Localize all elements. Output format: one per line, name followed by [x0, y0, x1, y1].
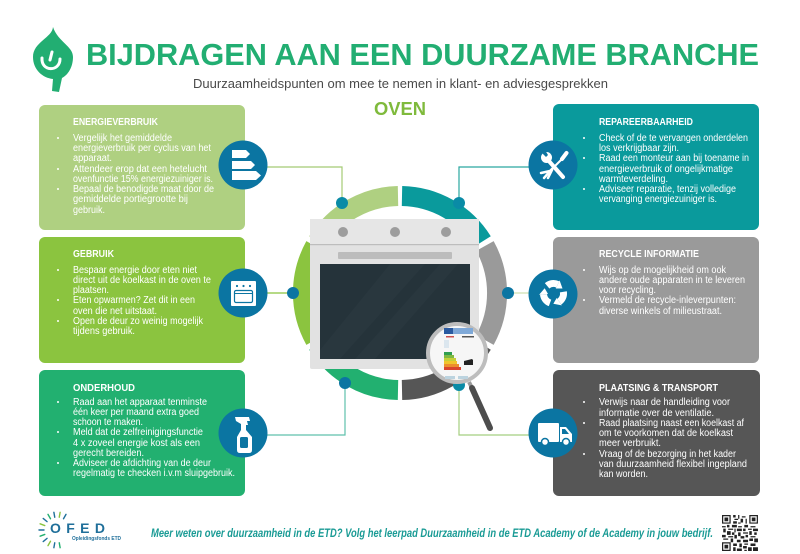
- text block: repareerbaarheid tips: energieverbruik of ongelijkmatige: [599, 164, 734, 175]
- text block: repareerbaarheid tips: los verkrijgbaar zijn.: [599, 143, 679, 154]
- panel: plaatsing en transport: [553, 370, 760, 496]
- text block: plaatsing tips: [583, 397, 747, 480]
- text block: repareerbaarheid tips: Adviseer reparatie, tenzij volledige: [599, 184, 736, 195]
- text block: energieverbruik tips: [57, 133, 215, 216]
- heading: energieverbruik: ENERGIEVERBRUIK: [73, 117, 158, 128]
- text block: energieverbruik tips: gebruik.: [73, 205, 105, 216]
- text block: energieverbruik tips: ovenfunctie 15% energiezuiniger is.: [73, 174, 213, 185]
- text block: energieverbruik tips: apparaat.: [73, 153, 112, 164]
- title: BIJDRAGEN AAN EEN DUURZAME BRANCHE: [86, 38, 759, 72]
- heading: repareerbaarheid: REPAREERBAARHEID: [599, 117, 693, 128]
- text block: onderhoud tips: schoon te maken.: [73, 417, 143, 428]
- text block: plaatsing tips: informatie over de ventilatie.: [599, 408, 714, 419]
- oven illustration: [310, 219, 479, 369]
- text block: gebruik tips: direct uit de koelkast in de oven te: [73, 275, 212, 286]
- text block: plaatsing tips: Raad plaatsing naast een koelkast af: [599, 418, 744, 429]
- text block: gebruik tips: oven die net uitstaat.: [73, 306, 157, 317]
- text block: energieverbruik tips: Attendeer erop dat een hetelucht: [73, 164, 207, 175]
- magnifying glass with energy label: [428, 324, 490, 428]
- text block: recycle tips: Wijs op de mogelijkheid om ook: [599, 265, 726, 276]
- text block: repareerbaarheid tips: Check of de te vervangen onderdelen: [599, 133, 748, 144]
- QR code: [722, 515, 758, 551]
- text block: onderhoud tips: regelmatig te checken i.v.m sluipgebruik.: [73, 468, 235, 479]
- text block: gebruik tips: Open de deur zo weinig mogelijk: [73, 316, 203, 327]
- text block: plaatsing tips: om te voorkomen dat de koelkast: [599, 428, 733, 439]
- text block: repareerbaarheid tips: [583, 133, 749, 205]
- icon: delivery truck: [528, 408, 578, 458]
- text block: energieverbruik tips: energieverbruik per cyclus van het: [73, 143, 211, 154]
- text block: recycle tips: Vermeld de recycle-inleverpunten:: [599, 295, 736, 306]
- text block: onderhoud tips: 4 x zoveel energie kost als een: [73, 438, 200, 449]
- text block: gebruik tips: Eten opwarmen? Zet dit in een: [73, 295, 195, 306]
- text block: plaatsing tips: Vraag of de bezorging in het kader: [599, 449, 737, 460]
- icon: tools: [528, 140, 578, 190]
- icon: spray bottle: [218, 408, 268, 458]
- text block: onderhoud tips: [57, 397, 235, 479]
- text block: plaatsing tips: kan worden.: [599, 469, 648, 480]
- text block: recycle tips: voor recycling.: [599, 285, 656, 296]
- logo: leaf with power symbol: [33, 27, 73, 92]
- logo: OFED: Opleidingsfonds ETD: [72, 536, 121, 542]
- text block: gebruik tips: Bespaar energie door eten niet: [73, 265, 197, 276]
- text block: repareerbaarheid tips: Raad een monteur aan bij toename in: [599, 153, 749, 164]
- text block: gebruik tips: plaatsen.: [73, 285, 109, 296]
- text block: recycle tips: diverse winkels of milieustraat.: [599, 306, 722, 317]
- text block: onderhoud tips: gerecht bereiden.: [73, 448, 144, 459]
- connector lines: [267, 167, 530, 435]
- ring: six coloured segments: [303, 196, 497, 390]
- panel: gebruik: [39, 237, 245, 363]
- icon: recycle: [528, 270, 578, 318]
- heading: oven: OVEN: [374, 98, 426, 119]
- heading: onderhoud: ONDERHOUD: [73, 383, 135, 394]
- icon: oven: [218, 268, 268, 318]
- text block: repareerbaarheid tips: vervanging energiezuiniger is.: [599, 194, 717, 205]
- text block: energieverbruik tips: Vergelijk het gemiddelde: [73, 133, 173, 144]
- text block: gebruik tips: [57, 265, 212, 337]
- logo: OFED: [39, 512, 121, 548]
- heading: recycle informatie: RECYCLE INFORMATIE: [599, 249, 699, 260]
- text block: recycle tips: andere oude apparaten in te leveren: [599, 275, 745, 286]
- panel: onderhoud: [39, 370, 245, 496]
- subtitle: Duurzaamheidspunten om mee te nemen in klant- en adviesgesprekken: [193, 76, 608, 91]
- text block: repareerbaarheid tips: warmteverdeling.: [598, 174, 668, 185]
- text block: onderhoud tips: Meld dat de zelfreinigingsfunctie: [73, 427, 204, 438]
- text block: onderhoud tips: één keer per maand extra goed: [73, 407, 199, 418]
- panel: repareerbaarheid: [553, 104, 759, 230]
- text block: onderhoud tips: Adviseer de afdichting van de deur: [73, 458, 212, 469]
- text block: gebruik tips: tijdens gebruik.: [73, 326, 135, 337]
- logo: OFED: OFED: [50, 520, 105, 536]
- icon: energy label: [218, 140, 268, 190]
- text block: recycle tips: [583, 265, 745, 317]
- panel: recycle informatie: [553, 237, 759, 363]
- text block: plaatsing tips: van duurzaamheid flexibel ingepland: [599, 459, 747, 470]
- panel: energieverbruik: [39, 105, 245, 230]
- text block: energieverbruik tips: Bepaal de benodigde maat door de: [73, 184, 215, 195]
- text block: plaatsing tips: meer verbruikt.: [599, 438, 661, 449]
- connector dots: [287, 197, 514, 391]
- text block: onderhoud tips: Raad aan het apparaat tenminste: [73, 397, 207, 408]
- heading: gebruik: GEBRUIK: [73, 249, 114, 260]
- text block: plaatsing tips: Verwijs naar de handleiding voor: [599, 397, 731, 408]
- text block: energieverbruik tips: gemiddelde portiegrootte bij: [73, 194, 188, 205]
- heading: plaatsing en transport: PLAATSING & TRANSPORT: [599, 383, 719, 394]
